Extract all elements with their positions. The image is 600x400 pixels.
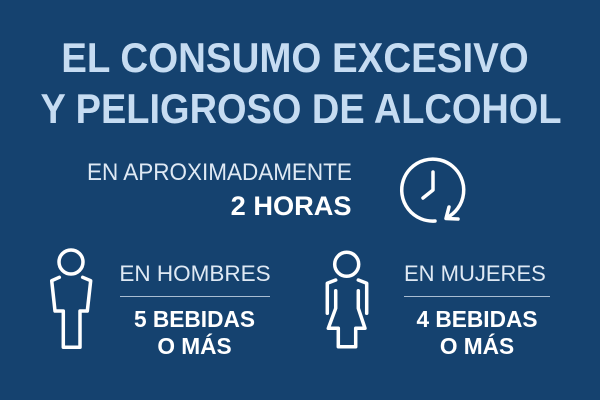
men amount <box>134 306 255 359</box>
women label: EN MUJERES <box>404 260 546 286</box>
women amount: 4 BEBIDAS <box>416 306 538 332</box>
time text <box>87 159 352 220</box>
title: Y PELIGROSO DE ALCOHOL <box>40 84 561 132</box>
icon: man <box>50 248 92 349</box>
men panel <box>119 260 271 359</box>
women amount: O MÁS <box>440 333 514 359</box>
title <box>40 34 561 132</box>
time text: EN APROXIMADAMENTE <box>87 159 352 186</box>
time text: 2 HORAS <box>231 190 352 220</box>
men amount: 5 BEBIDAS <box>134 306 255 332</box>
men amount: O MÁS <box>157 333 232 359</box>
men label: EN HOMBRES <box>119 260 271 286</box>
icon: clock with arrow <box>400 157 466 223</box>
women amount <box>416 306 538 359</box>
women panel <box>404 260 550 359</box>
icon: woman <box>326 250 368 348</box>
title: EL CONSUMO EXCESIVO <box>61 34 529 81</box>
